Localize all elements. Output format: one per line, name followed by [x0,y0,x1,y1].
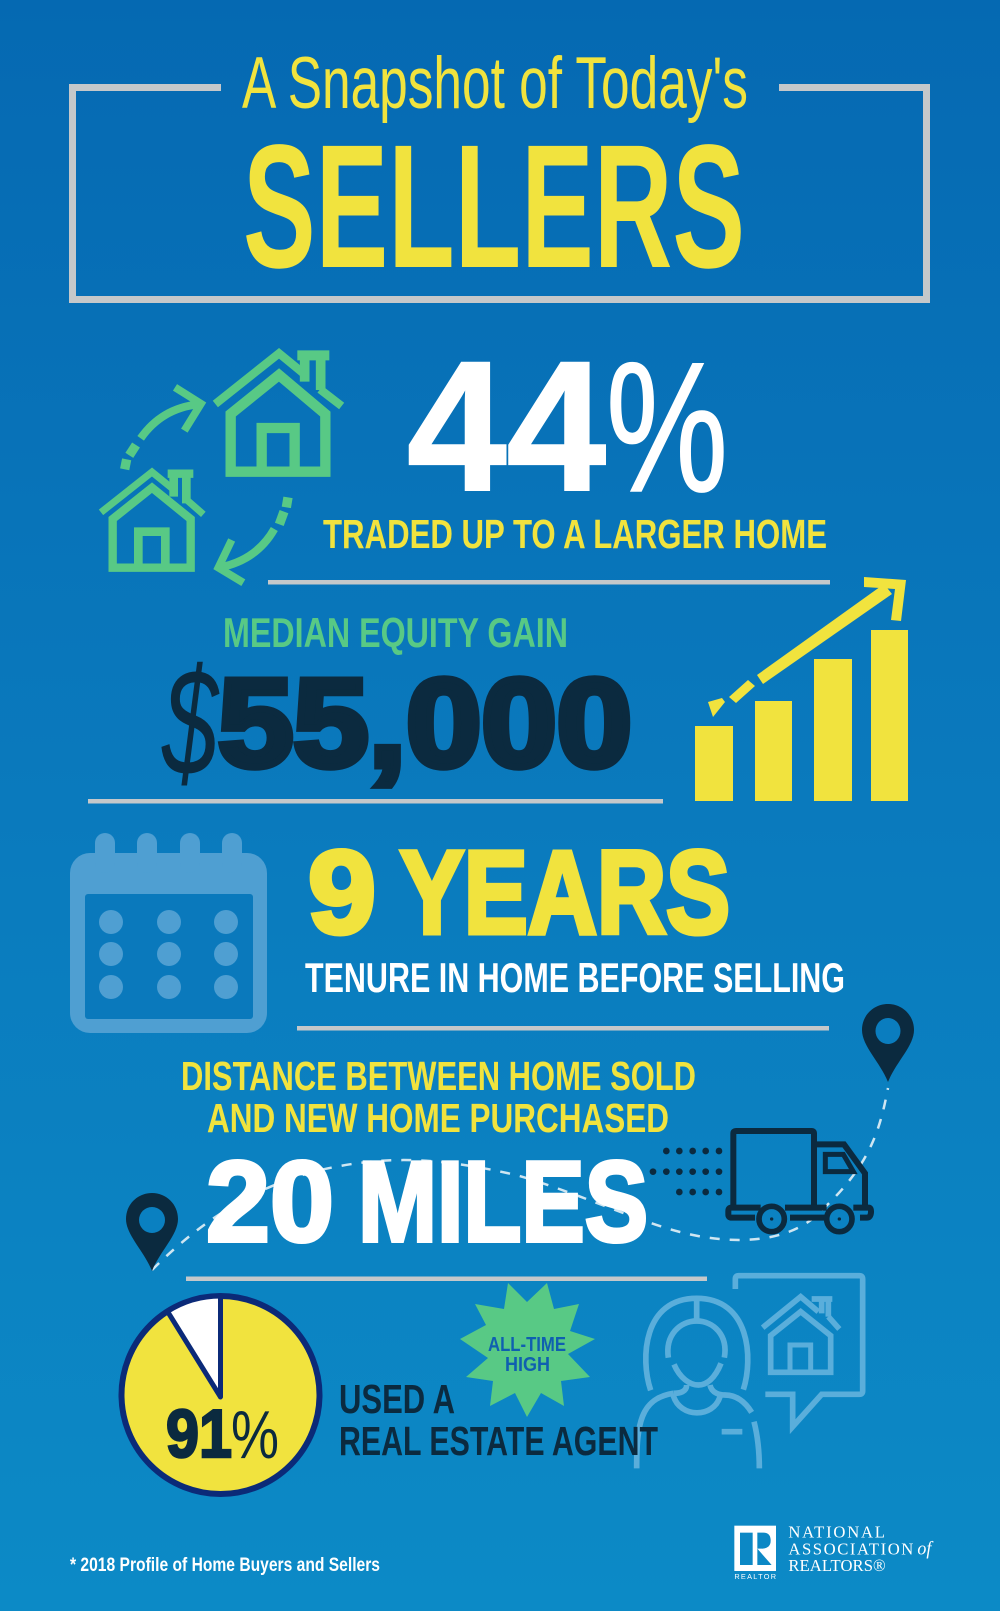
callout text line 1: ALL-TIME [488,1334,566,1356]
logo mark [734,1526,776,1581]
stat: 9 years tenure [305,827,845,1001]
stat: distance between homes [181,1053,696,1266]
title: subtitle line: A Snapshot of Today's [242,43,748,124]
footnote: * 2018 Profile of Home Buyers and Sellers [70,1554,380,1576]
stat text: used a real estate agent: USED A [339,1376,455,1422]
icon: moving truck with speed dots [650,1131,871,1232]
caption line 1: DISTANCE BETWEEN HOME SOLD [181,1053,696,1099]
callout text line 2: HIGH [505,1354,550,1376]
icon: upper map pin [862,1004,914,1082]
icon: agent with speech bubble and house [637,1276,863,1468]
stat: median equity gain [161,609,632,808]
caption: TRADED UP TO A LARGER HOME [323,511,827,557]
word MILES: MILES [358,1139,648,1266]
number 44: 44 [407,324,606,530]
logo wordmark: REALTORS® [788,1556,886,1575]
percent sign: % [231,1397,279,1473]
word YEARS: YEARS [400,827,730,959]
dashed route line [152,1088,888,1270]
icon: two houses with circular arrows [101,353,342,583]
stat text: used a real estate agent: REAL ESTATE AGENT [339,1418,658,1464]
number 20: 20 [206,1139,334,1266]
number 9: 9 [308,827,376,959]
icon: lower map pin [126,1193,178,1271]
logo mark: REALTOR [734,1572,776,1581]
logo: National Association of Realtors [734,1522,934,1581]
number 91: 91 [166,1396,232,1472]
logo wordmark [788,1522,934,1575]
stat text: used a real estate agent [339,1376,658,1464]
logo wordmark: NATIONAL [788,1522,885,1541]
icon: rising bar chart with arrow [695,577,908,801]
label: MEDIAN EQUITY GAIN [223,609,568,656]
percent sign: % [606,325,728,531]
callout: all-time high starburst [460,1283,595,1417]
logo wordmark: of [917,1538,934,1559]
title panel [72,43,926,305]
logo wordmark: ASSOCIATION [788,1539,913,1558]
icon: calendar [70,833,267,1033]
caption line 2: AND NEW HOME PURCHASED [207,1095,669,1141]
pie chart: 91 percent [122,1296,320,1494]
stat: 44 percent [323,324,827,557]
amount: 55,000 [218,654,632,793]
dollar sign: $ [161,637,220,808]
